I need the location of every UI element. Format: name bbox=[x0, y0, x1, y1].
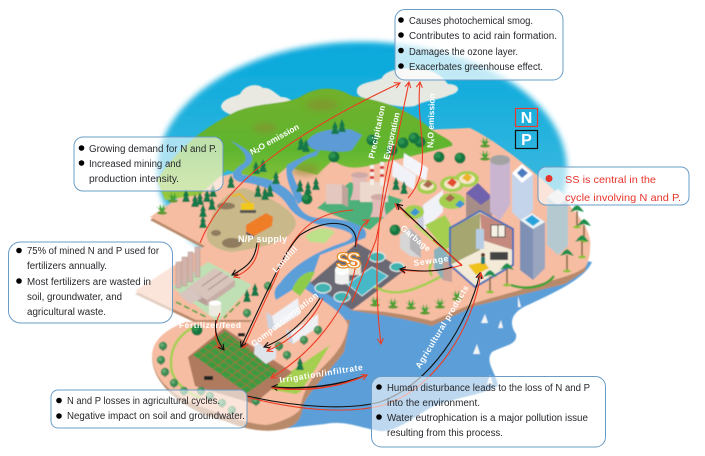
flow labels: Garbage bbox=[399, 223, 433, 254]
round trees bbox=[192, 132, 466, 336]
green path arc bbox=[171, 327, 200, 398]
legend: P box: P bbox=[521, 132, 532, 149]
sewage domes bbox=[335, 261, 361, 284]
arrow: irrigation infiltrate bbox=[272, 375, 367, 389]
callout: growing demand: production intensity. bbox=[89, 174, 179, 185]
icon: orange truck bbox=[246, 213, 273, 238]
legend: N box: N bbox=[521, 110, 532, 127]
sewage plant base bbox=[310, 243, 405, 310]
callout: human disturbance bbox=[372, 376, 606, 447]
factory pad dashes bbox=[176, 302, 240, 318]
arrow: N2O emission from plant bbox=[408, 82, 422, 198]
sailboats bbox=[473, 296, 521, 384]
arrow: fertilizer bbox=[215, 313, 224, 350]
arrow: SS to power plant bbox=[356, 220, 369, 246]
orchard trees bbox=[157, 326, 322, 415]
icon: excavator bbox=[232, 194, 256, 213]
flow labels: O emission bbox=[425, 93, 437, 139]
power plant pad bbox=[317, 182, 403, 230]
arrow: compost bbox=[264, 298, 323, 351]
callout: human disturbance: into the environment. bbox=[387, 398, 480, 409]
flow labels: O emission bbox=[256, 122, 301, 152]
houses bbox=[410, 173, 475, 216]
green field corner bbox=[272, 345, 330, 394]
arrow: precipitation down bbox=[377, 145, 393, 344]
callout: growing demand: Increased mining and bbox=[89, 159, 181, 170]
arrow: landfill red bbox=[243, 210, 353, 348]
lake bbox=[307, 129, 362, 152]
garbage building bbox=[400, 228, 421, 258]
arrow: N2O emission to atmosphere bbox=[200, 83, 400, 243]
flow labels: Landfill bbox=[270, 244, 299, 274]
callout: atmospheric effects bbox=[395, 10, 563, 80]
flow labels: Evaporation bbox=[381, 111, 402, 160]
callout: growing demand: Growing demand for N and P. bbox=[89, 144, 217, 155]
callout: agricultural losses bbox=[51, 390, 247, 428]
factory pad bbox=[172, 262, 252, 322]
cows bbox=[204, 333, 245, 380]
mountain shading bbox=[253, 99, 338, 176]
callout: atmospheric effects: Damages the ozone layer. bbox=[409, 47, 518, 58]
icon: storage tank bbox=[209, 300, 221, 316]
white apartments bbox=[392, 153, 443, 230]
callout: fertilizers: agricultural waste. bbox=[27, 307, 106, 318]
flow labels: Fertilizer/feed bbox=[179, 320, 241, 330]
farm crop field bbox=[193, 331, 278, 393]
arrow: agricultural products bbox=[247, 273, 481, 410]
flow arrows bbox=[200, 82, 481, 410]
flow labels: x bbox=[430, 138, 436, 142]
city towers bbox=[466, 155, 568, 255]
illustrated landscape bbox=[135, 68, 592, 431]
water and bay bbox=[240, 200, 592, 431]
mining area bbox=[207, 188, 296, 252]
arrow: irrigation to field bbox=[271, 262, 356, 378]
palm trees bbox=[483, 205, 591, 294]
sewage building bbox=[434, 245, 452, 282]
flow labels: N/P supply bbox=[238, 234, 287, 244]
land edge shadow bbox=[135, 190, 590, 326]
green house plots bbox=[404, 171, 479, 250]
flow labels: Precipitation bbox=[366, 105, 387, 159]
callout: fertilizers: Most fertilizers are wasted in bbox=[27, 277, 151, 288]
legend: P box bbox=[516, 130, 538, 149]
sky dome background bbox=[157, 42, 567, 298]
farm soil bbox=[188, 328, 292, 404]
arrow: N/P supply bbox=[232, 243, 259, 277]
conifer trees bbox=[182, 119, 408, 370]
flow labels: Agricultural products bbox=[413, 283, 471, 370]
callout: fertilizers bbox=[8, 242, 172, 323]
flow labels: N bbox=[248, 145, 258, 157]
sewage aeration tanks bbox=[347, 267, 388, 296]
callout: SS central bbox=[538, 167, 689, 205]
callout: SS central: SS is central in the bbox=[565, 174, 656, 186]
flow labels: Compost/irrigation bbox=[249, 290, 320, 349]
clouds bbox=[221, 68, 458, 119]
flow labels: N bbox=[425, 142, 435, 148]
callout: SS central: cycle involving N and P. bbox=[565, 192, 681, 204]
grass tufts bbox=[156, 137, 491, 315]
lower peninsula land bbox=[152, 285, 348, 425]
arrow: landfill black bbox=[241, 223, 356, 347]
road bands bbox=[372, 225, 554, 292]
callout: human disturbance: resulting from this process. bbox=[387, 428, 503, 439]
green plots around plant bbox=[292, 229, 335, 296]
factory towers bbox=[176, 247, 200, 288]
flow labels: Irrigation/infiltrate bbox=[279, 362, 364, 385]
callout: fertilizers: soil, groundwater, and bbox=[27, 292, 122, 303]
arrow: garbage bbox=[395, 204, 462, 266]
river bbox=[230, 140, 366, 328]
callout: fertilizers: fertilizers annually. bbox=[27, 261, 107, 272]
callout: agricultural losses: N and P losses in agricultural cycles. bbox=[67, 396, 220, 407]
power plant bbox=[326, 162, 388, 217]
SS label: SS bbox=[336, 248, 361, 273]
callout: atmospheric effects: Causes photochemical smog. bbox=[409, 16, 533, 27]
main pink land bbox=[135, 128, 590, 322]
callout: human disturbance: Water eutrophication is a major pollution issue bbox=[387, 413, 588, 424]
callout: growing demand bbox=[74, 137, 223, 191]
arrow: precipitation up bbox=[352, 82, 409, 302]
callout: agricultural losses: Negative impact on soil and groundwater. bbox=[67, 411, 245, 422]
callout: atmospheric effects: Exacerbates greenhouse effect. bbox=[409, 62, 543, 73]
front tower bbox=[520, 213, 545, 280]
flow labels: Sewage bbox=[413, 253, 449, 268]
small white buildings on peninsula bbox=[254, 298, 318, 364]
flow labels: 2 bbox=[256, 147, 262, 155]
legend: N box bbox=[516, 108, 538, 127]
mountains bbox=[157, 89, 453, 200]
callout: fertilizers: 75% of mined N and P used for bbox=[27, 246, 160, 257]
callout: atmospheric effects: Contributes to acid rain formation. bbox=[409, 31, 557, 42]
house cross-section bbox=[450, 211, 513, 287]
river upper branch bbox=[286, 150, 320, 204]
callout: human disturbance: Human disturbance leads to the loss of N and P bbox=[387, 383, 590, 394]
factory buildings bbox=[178, 268, 235, 306]
dirt piles bbox=[211, 202, 242, 248]
lower peninsula edge bbox=[152, 320, 350, 431]
arrow: sewage bbox=[400, 240, 462, 271]
flow labels bbox=[179, 93, 471, 385]
sewage plant basins bbox=[315, 252, 404, 302]
